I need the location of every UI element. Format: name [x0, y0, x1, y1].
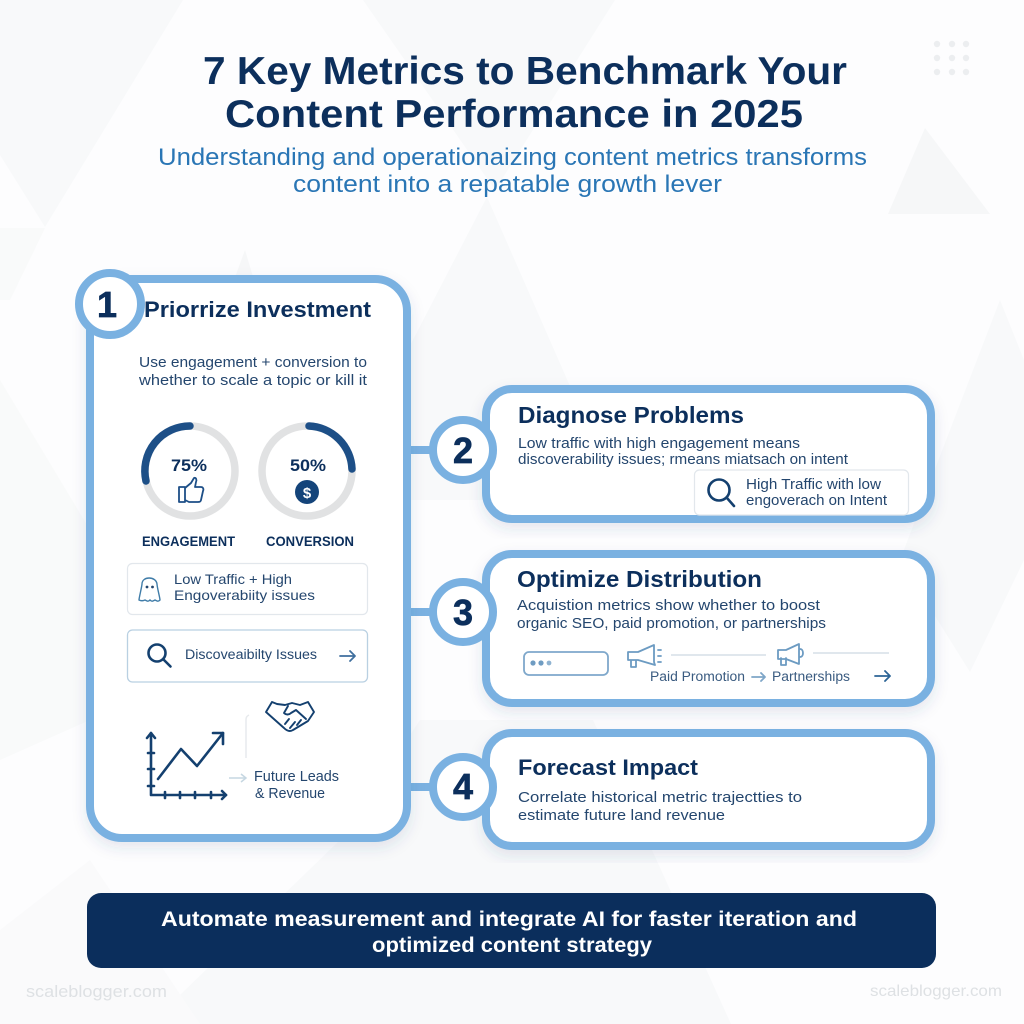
number badge 1: 1: [97, 284, 117, 325]
donut: engagement 75%: 75%: [171, 456, 207, 475]
card 2 callout: High Traffic with low: [746, 477, 882, 493]
connectors between panel 1 and the step cards: [405, 446, 440, 791]
icon: dollar coin: $: [303, 485, 312, 502]
metric labels: ENGAGEMENT: [142, 534, 236, 549]
card 4 body: estimate future land revenue: [518, 808, 725, 824]
card 2 heading: Diagnose Problems: [518, 402, 744, 428]
number badge 4: [433, 757, 493, 817]
number badge 2: [433, 420, 493, 480]
chart: growth line: [147, 733, 226, 799]
icon: ghost: [139, 578, 160, 601]
card 4 body: Correlate historical metric trajectties to: [518, 790, 802, 806]
decorative bracket: [246, 715, 249, 758]
card 3 body: [517, 598, 826, 632]
title: [203, 50, 847, 136]
card 4: forecast impact: [433, 733, 931, 846]
card 2 body: Low traffic with high engagement means: [518, 436, 800, 452]
card 2: diagnose problems: [433, 389, 931, 519]
icon: megaphone: [778, 644, 803, 665]
future leads label: Future Leads: [254, 769, 339, 785]
panel 1 description: Use engagement + conversion to: [139, 354, 367, 371]
panel 1 description: [138, 354, 368, 389]
future leads label: & Revenue: [255, 786, 325, 802]
subtitle: [158, 144, 867, 198]
card 4 body: [518, 790, 802, 824]
icon: search bar: [524, 652, 608, 675]
card 3 body: organic SEO, paid promotion, or partnerships: [517, 616, 826, 632]
icon: magnifier: [148, 644, 170, 666]
arrow: [875, 671, 890, 681]
callout: discoverability: Discoveaibilty Issues: [185, 647, 317, 662]
bottom banner: Automate measurement and integrate AI for faster iteration and: [161, 907, 857, 931]
future leads label: [254, 769, 339, 802]
donut: engagement 75%: [145, 426, 235, 516]
icon: megaphone: [628, 645, 661, 667]
footer: left brand: scaleblogger.com: [26, 983, 167, 1001]
card 3 heading: Optimize Distribution: [517, 566, 762, 592]
arrow: [229, 774, 246, 782]
number badge 3: 3: [453, 592, 473, 633]
bottom banner: optimized content strategy: [372, 933, 652, 957]
panel 1 heading: Priorrize Investment: [144, 297, 372, 322]
callout: low traffic: Low Traffic + High: [174, 571, 292, 587]
metric labels: [142, 534, 354, 549]
subtitle: Understanding and operationaizing content metrics transforms: [158, 144, 867, 171]
card 3: optimize distribution: [433, 554, 931, 703]
callout: low traffic: Engoverabiity issues: [174, 587, 315, 603]
title: Content Performance in 2025: [225, 93, 803, 136]
card 4 heading: Forecast Impact: [518, 755, 699, 780]
card 2 body: [518, 436, 848, 468]
metric labels: CONVERSION: [266, 534, 354, 549]
bottom banner: [87, 893, 936, 968]
card 2 callout: engoverach on Intent: [746, 493, 887, 509]
decorative dot grid: [934, 41, 969, 75]
icon: thumbs up: [179, 478, 203, 502]
arrow: [340, 651, 355, 661]
arrow: [752, 673, 765, 681]
donut: conversion 50%: [262, 426, 352, 516]
donut: conversion 50%: 50%: [290, 456, 326, 475]
icon: handshake: [266, 702, 314, 731]
footer: right brand: scaleblogger.com: [870, 983, 1002, 1000]
partnerships label: Partnerships: [772, 669, 850, 684]
card 3 body: Acquistion metrics show whether to boost: [517, 598, 820, 614]
number badge 4: 4: [453, 766, 473, 807]
icon: magnifier: [708, 480, 734, 506]
panel 1: prioritize investment: [79, 273, 407, 838]
callout: discoverability: [128, 630, 368, 682]
paid promotion label: Paid Promotion: [650, 669, 745, 684]
number badge 2: 2: [453, 430, 473, 471]
card 2 body: discoverability issues; rmeans miatsach on intent: [518, 452, 848, 468]
subtitle: content into a repatable growth lever: [293, 171, 722, 198]
callout: low traffic: [128, 564, 368, 614]
panel 1 description: whether to scale a topic or kill it: [138, 372, 368, 389]
number badge 1: [79, 273, 141, 335]
number badge 3: [433, 582, 493, 642]
title: 7 Key Metrics to Benchmark Your: [203, 50, 847, 93]
card 2 callout: [694, 470, 908, 515]
